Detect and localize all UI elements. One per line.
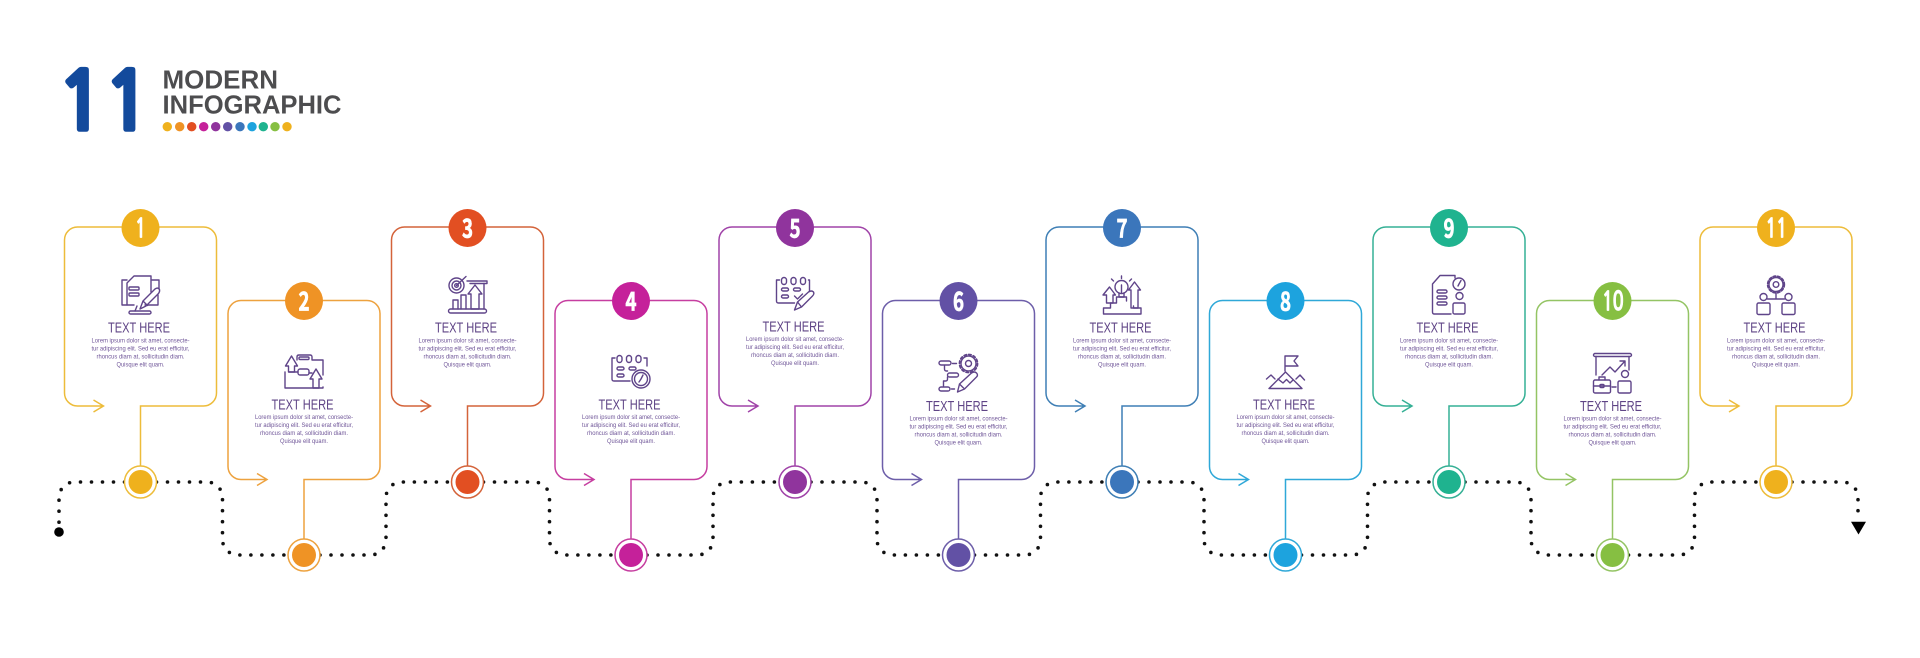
icon: light bulb with arrows on podium	[1103, 276, 1141, 314]
step 2 heading: TEXT HERE	[272, 397, 334, 413]
step 2 timeline node	[288, 539, 320, 571]
step 7 body text: rhoncus diam at, sollicitudin diam.	[1078, 353, 1166, 360]
step 9 body text: Quisque elit quam.	[1425, 361, 1473, 368]
icon: folder with arrows	[285, 355, 323, 388]
step 7 number: 7	[1116, 208, 1128, 246]
panel: step 2	[228, 281, 380, 571]
step 8 body text: Quisque elit quam.	[1262, 438, 1310, 445]
step 9 outline	[1373, 227, 1525, 482]
step 8 body text: tur adipiscing elit. Sed eu erat efficitur,	[1236, 422, 1335, 429]
step 9 body text: Lorem ipsum dolor sit amet, consecte-	[1400, 337, 1498, 344]
panel: step 1	[64, 209, 216, 498]
step 8 body text: Lorem ipsum dolor sit amet, consecte-	[1236, 414, 1334, 421]
step 1 body text: rhoncus diam at, sollicitudin diam.	[96, 353, 185, 360]
step 9 badge	[1430, 209, 1468, 247]
step 5 body text: tur adipiscing elit. Sed eu erat efficitur,	[746, 344, 844, 351]
step 7 heading: TEXT HERE	[1090, 321, 1152, 337]
step 2 body text: Quisque elit quam.	[280, 438, 328, 445]
step 6 badge	[940, 282, 978, 320]
step 3 outline	[392, 227, 544, 482]
title number 11: 1	[56, 63, 106, 143]
step 9 timeline node	[1433, 466, 1465, 498]
step 6 body text: Quisque elit quam.	[934, 440, 983, 446]
title colour dots	[163, 122, 292, 131]
icon: workflow with gear and pencil	[939, 354, 978, 392]
step 11 body text: Quisque elit quam.	[1752, 361, 1800, 368]
step 11 badge	[1757, 209, 1795, 247]
step 4 body text: rhoncus diam at, sollicitudin diam.	[587, 430, 675, 437]
icon: target with growth chart	[448, 276, 487, 313]
step 5 body text: Lorem ipsum dolor sit amet, consecte-	[746, 336, 844, 343]
step 2 badge	[285, 282, 323, 320]
step 5 body text: rhoncus diam at, sollicitudin diam.	[751, 352, 839, 359]
step 10 body text: tur adipiscing elit. Sed eu erat efficitur,	[1564, 424, 1662, 430]
step 4 timeline node	[615, 539, 647, 571]
step 5 outline	[719, 227, 871, 482]
step 8 body text: rhoncus diam at, sollicitudin diam.	[1242, 430, 1330, 437]
step 8 badge	[1266, 282, 1304, 320]
panel: step 6	[882, 281, 1034, 571]
step 10 number: 10	[1602, 290, 1623, 315]
step 1 body text: tur adipiscing elit. Sed eu erat efficitur,	[92, 345, 190, 352]
panel: step 5	[719, 208, 871, 498]
timeline start dot	[54, 527, 64, 537]
step 7 timeline node	[1106, 466, 1138, 498]
dotted timeline path	[54, 482, 1866, 555]
icon: presentation board with briefcase	[1594, 354, 1632, 393]
step 9 body text	[1400, 337, 1498, 368]
step 3 heading: TEXT HERE	[435, 321, 497, 337]
step 7 outline	[1046, 227, 1198, 482]
step 2 body text	[255, 414, 353, 445]
step 2 body text: tur adipiscing elit. Sed eu erat efficitur,	[255, 422, 353, 429]
step 2 body text: Lorem ipsum dolor sit amet, consecte-	[255, 414, 353, 421]
icon: flag on mountain	[1266, 356, 1304, 388]
step 7 body text: Quisque elit quam.	[1098, 361, 1146, 368]
step 6 outline	[882, 300, 1034, 555]
step 10 badge	[1594, 282, 1632, 320]
step 8 heading: TEXT HERE	[1253, 397, 1315, 413]
step 8 number: 8	[1280, 281, 1291, 319]
title block	[56, 63, 342, 143]
step 3 timeline node	[452, 466, 484, 498]
icon: document with clock and person	[1432, 276, 1465, 314]
panel: step 11	[1700, 209, 1852, 498]
timeline end arrow	[1851, 522, 1866, 534]
step 11 outline	[1700, 227, 1852, 482]
title word MODERN: MODERN	[162, 66, 278, 94]
step 4 body text: Quisque elit quam.	[607, 438, 655, 445]
step 6 body text: rhoncus diam at, sollicitudin diam.	[914, 432, 1003, 438]
step 1 timeline node	[124, 466, 156, 498]
step 10 body text: rhoncus diam at, sollicitudin diam.	[1568, 432, 1657, 438]
step 9 heading: TEXT HERE	[1416, 321, 1479, 337]
icon: calendar with pencil	[776, 278, 814, 310]
step 4 body text	[582, 414, 680, 445]
panel: step 4	[555, 281, 707, 571]
step 5 badge	[776, 209, 814, 247]
step 11 body text: tur adipiscing elit. Sed eu erat efficitur,	[1727, 345, 1825, 352]
step 8 timeline node	[1270, 539, 1302, 571]
panel: step 9	[1373, 208, 1525, 498]
step 11 body text: Lorem ipsum dolor sit amet, consecte-	[1727, 337, 1825, 344]
step 8 outline	[1210, 300, 1362, 555]
step 7 body text	[1073, 337, 1171, 368]
step 10 body text: Quisque elit quam.	[1588, 440, 1637, 446]
icon: gear with two people	[1757, 276, 1795, 314]
step 5 timeline node	[779, 466, 811, 498]
step 6 timeline node	[942, 539, 974, 571]
step 5 heading: TEXT HERE	[762, 319, 825, 335]
step 11 body text	[1727, 337, 1825, 368]
step 1 body text: Lorem ipsum dolor sit amet, consecte-	[92, 337, 190, 344]
step 5 number: 5	[789, 208, 801, 246]
step 1 badge	[122, 209, 160, 247]
step 1 heading: TEXT HERE	[108, 321, 170, 337]
icon: calendar with clock	[612, 356, 650, 388]
step 10 outline	[1536, 300, 1688, 555]
step 6 number: 6	[953, 281, 964, 319]
step 7 badge	[1103, 209, 1141, 247]
step 4 body text: tur adipiscing elit. Sed eu erat efficitur,	[582, 422, 680, 429]
step 6 body text: tur adipiscing elit. Sed eu erat efficitur,	[910, 424, 1008, 430]
step 6 heading: TEXT HERE	[926, 399, 988, 415]
step 9 body text: tur adipiscing elit. Sed eu erat efficitur,	[1400, 345, 1498, 352]
step 10 body text	[1564, 416, 1662, 446]
panel: step 10	[1536, 282, 1688, 571]
step 3 body text: Quisque elit quam.	[444, 361, 492, 368]
step 3 number: 3	[462, 208, 473, 246]
step 4 outline	[555, 300, 707, 555]
step 1 outline	[64, 227, 216, 482]
step 11 number: 11	[1765, 217, 1787, 242]
step 3 badge	[448, 209, 486, 247]
step 6 body text	[910, 416, 1008, 446]
title number 11: 1	[103, 63, 152, 143]
step 5 body text: Quisque elit quam.	[771, 360, 819, 367]
panel: step 7	[1046, 208, 1198, 498]
step 5 body text	[746, 336, 844, 367]
step 7 body text: Lorem ipsum dolor sit amet, consecte-	[1073, 337, 1171, 344]
step 4 number: 4	[625, 281, 637, 319]
step 3 body text: rhoncus diam at, sollicitudin diam.	[424, 353, 512, 360]
step 2 body text: rhoncus diam at, sollicitudin diam.	[260, 430, 348, 437]
step 9 number: 9	[1443, 208, 1455, 246]
step 11 body text: rhoncus diam at, sollicitudin diam.	[1732, 353, 1820, 360]
step 11 timeline node	[1760, 466, 1792, 498]
icon: document on monitor with pencil	[122, 276, 160, 314]
step 4 badge	[612, 282, 650, 320]
title word INFOGRAPHIC: INFOGRAPHIC	[162, 91, 342, 119]
step 3 body text: tur adipiscing elit. Sed eu erat efficitur,	[418, 345, 517, 352]
panel: step 8	[1210, 281, 1362, 571]
step 9 body text: rhoncus diam at, sollicitudin diam.	[1405, 353, 1493, 360]
step 2 outline	[228, 300, 380, 555]
step 1 body text: Quisque elit quam.	[116, 361, 165, 368]
step 10 timeline node	[1596, 539, 1628, 571]
step 8 body text	[1236, 414, 1335, 445]
step 3 body text: Lorem ipsum dolor sit amet, consecte-	[418, 337, 516, 344]
step 10 heading: TEXT HERE	[1580, 399, 1642, 415]
step 6 body text: Lorem ipsum dolor sit amet, consecte-	[910, 416, 1008, 422]
step 2 number: 2	[298, 281, 310, 319]
step 4 body text: Lorem ipsum dolor sit amet, consecte-	[582, 414, 680, 421]
panel: step 3	[392, 208, 544, 498]
step 7 body text: tur adipiscing elit. Sed eu erat efficitur,	[1073, 345, 1171, 352]
step 4 heading: TEXT HERE	[598, 397, 661, 413]
step 11 heading: TEXT HERE	[1744, 321, 1806, 337]
step 3 body text	[418, 337, 517, 368]
step 10 body text: Lorem ipsum dolor sit amet, consecte-	[1564, 416, 1662, 422]
step 1 number: 1	[135, 217, 146, 242]
step 1 body text	[92, 337, 190, 368]
